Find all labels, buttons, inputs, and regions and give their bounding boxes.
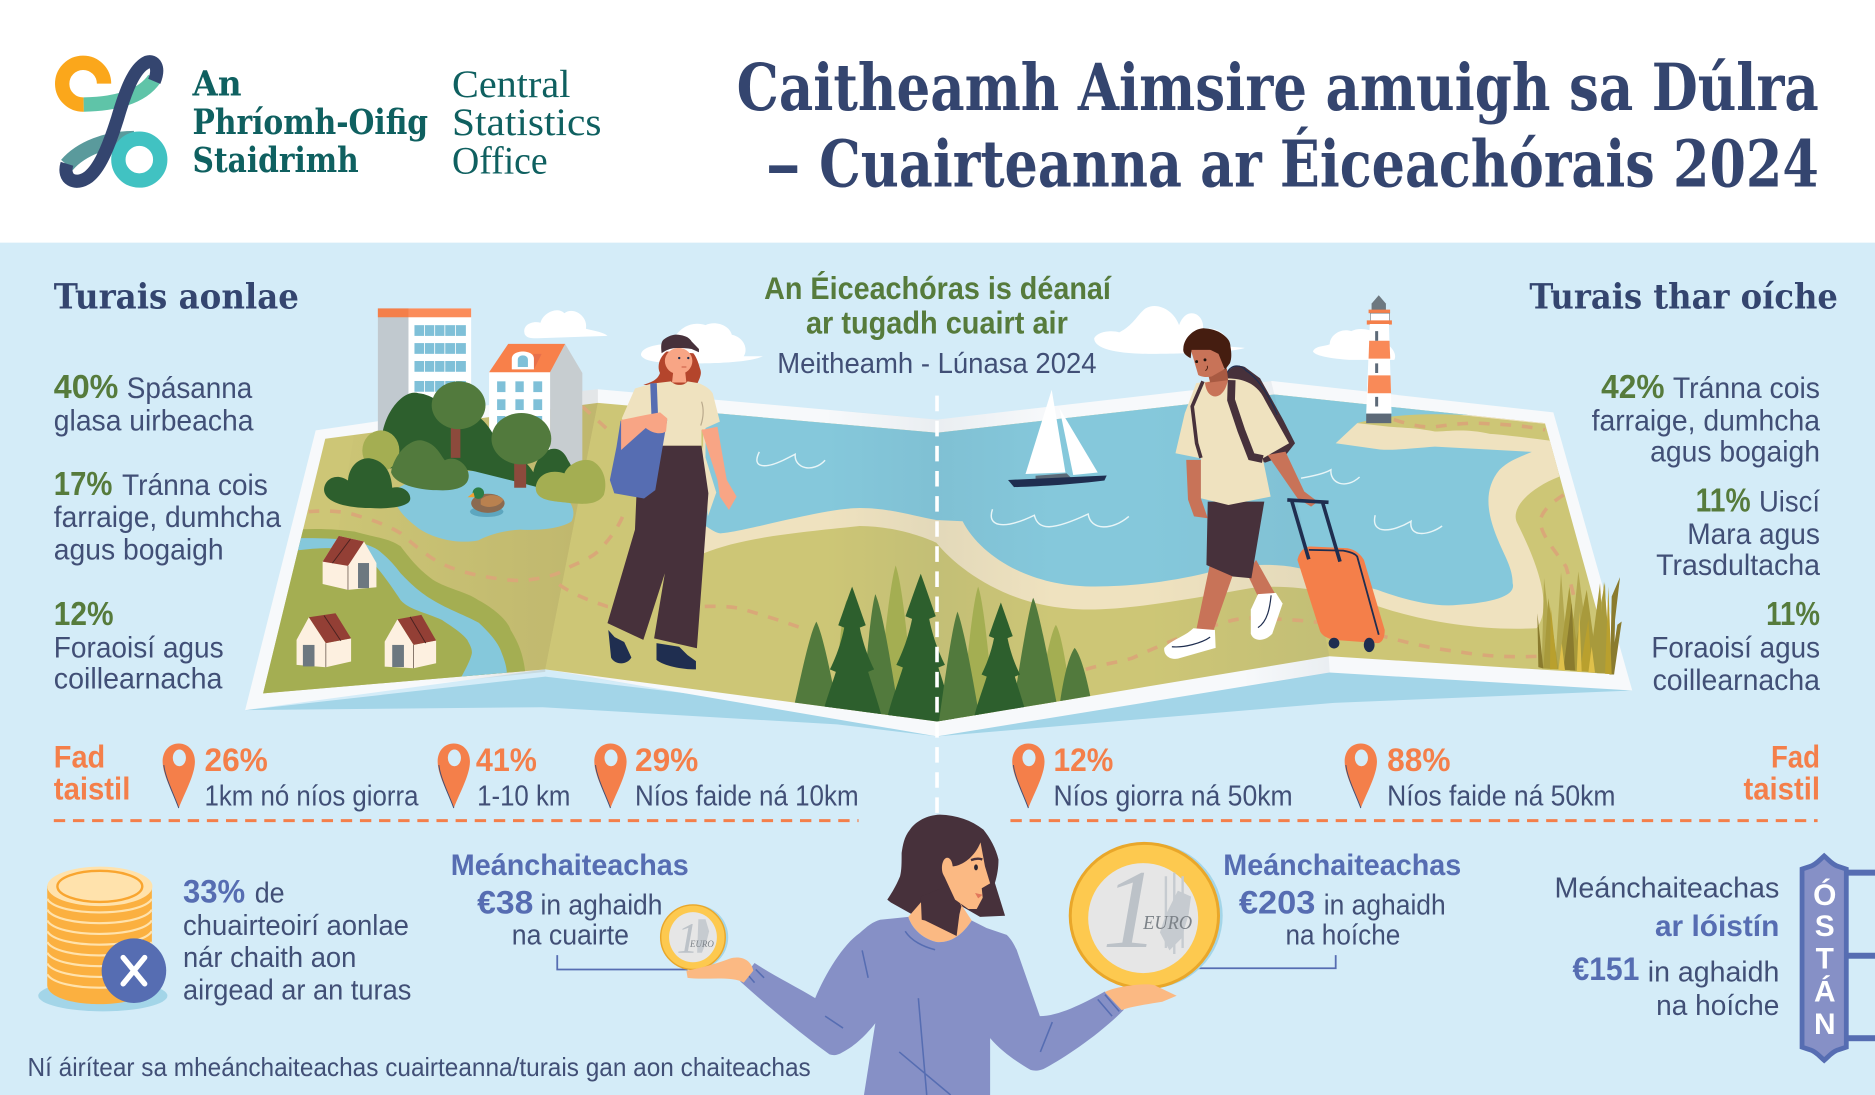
hotel text: in aghaidh: [1648, 956, 1779, 988]
icon: sailing boat: [1008, 390, 1107, 487]
icon: waves: [757, 452, 1442, 533]
map sheet: [245, 381, 1632, 736]
travel distance label right: [1743, 739, 1820, 807]
hotel text: Meánchaiteachas: [1555, 873, 1779, 905]
overnight ecosystem stats: 11%: [1766, 596, 1820, 633]
pond: [394, 471, 573, 542]
icon: house 1: [323, 536, 376, 590]
icon: house 3: [385, 615, 436, 668]
overnight ecosystem stats: [1592, 369, 1821, 697]
distance stat: 41%: 1-10 km: [477, 781, 570, 813]
icon: small euro coin: 1: [677, 916, 698, 963]
icon: tall building: [378, 308, 471, 434]
icon: house 2: [297, 613, 351, 667]
distance stat: 88%: [1345, 742, 1616, 813]
clouds: [524, 306, 1395, 363]
overnight average spend: [1223, 849, 1461, 951]
overnight ecosystem stats: farraige, dumhcha: [1592, 404, 1821, 437]
icon: hotel sign: Á: [1814, 975, 1836, 1009]
day-trip ecosystem stats: 12%: [54, 596, 114, 633]
logo Irish name: Staidrimh: [193, 140, 359, 181]
overnight ecosystem stats: Mara agus: [1687, 518, 1820, 551]
day-trip ecosystem stats: [54, 369, 282, 696]
map terrain: [263, 394, 1614, 722]
distance stat: 26%: [163, 742, 419, 813]
icon: pin: [594, 744, 627, 808]
houses: [297, 536, 436, 668]
icon: woman with bag: [607, 335, 737, 669]
icon: hotel sign: Ó: [1813, 878, 1836, 912]
logo English name: Statistics: [452, 100, 601, 144]
overnight average spend: €203: [1239, 884, 1315, 920]
day-trip average spend: in aghaidh: [540, 889, 662, 921]
icon: small euro coin: EURO: [689, 939, 714, 950]
day-trip ecosystem stats: Tránna cois: [122, 469, 268, 502]
icon: man with suitcase: [1164, 328, 1385, 659]
icon: coin stack with cross: [38, 867, 167, 1011]
distance stat: 26%: 26%: [204, 742, 268, 778]
light blue background: [0, 243, 1875, 1095]
no-spend text: [183, 874, 411, 1006]
overnight average spend: Meánchaiteachas: [1223, 849, 1461, 882]
travel distance label right: taistil: [1743, 772, 1820, 807]
icon: conifer forest: [792, 565, 1094, 724]
icon: lighthouse: [1366, 295, 1392, 423]
no-spend text: chuairteoirí aonlae: [183, 910, 409, 942]
icon: duck: [468, 487, 505, 517]
centre heading: ar tugadh cuairt air: [806, 306, 1068, 341]
river banks: [263, 529, 525, 694]
day-trip ecosystem stats: coillearnacha: [54, 663, 223, 696]
day-trip average spend: Meánchaiteachas: [451, 849, 689, 882]
distance stat: 88%: Níos faide ná 50km: [1387, 781, 1616, 813]
icon: small euro coin: [661, 905, 728, 969]
travel distance label left: Fad: [54, 739, 105, 774]
coast sand: [703, 394, 1559, 629]
icon: large euro coin: 1: [1103, 848, 1159, 972]
no-spend text: 33%: [183, 874, 245, 910]
icon: large euro coin: EURO: [1142, 912, 1193, 934]
header band: [0, 0, 1875, 243]
day-trip ecosystem stats: 40%: [54, 369, 118, 406]
icon: woman holding coins: [686, 815, 1177, 1095]
logo English name: [452, 62, 601, 182]
travel distance label right: Fad: [1771, 739, 1820, 774]
river: [287, 538, 507, 679]
hotel text: na hoíche: [1656, 990, 1779, 1022]
day-trip average spend: [451, 849, 689, 951]
distance stat: 41%: [438, 742, 570, 813]
day-trip ecosystem stats: glasa uirbeacha: [54, 404, 254, 437]
icon: small building: [489, 344, 582, 469]
distance stat: 41%: 41%: [476, 742, 537, 778]
day-trip ecosystem stats: agus bogaigh: [54, 533, 224, 566]
overnight average spend: in aghaidh: [1324, 889, 1446, 921]
map paths: [309, 406, 1574, 669]
overnight ecosystem stats: Tránna cois: [1673, 372, 1820, 405]
icon: hotel sign: N: [1814, 1008, 1836, 1041]
day-trip average spend: na cuairte: [512, 919, 629, 951]
distance stat: 29%: 29%: [635, 742, 698, 778]
map shadow: [245, 667, 1632, 736]
distance stat: 12%: [1012, 742, 1293, 813]
day-trip ecosystem stats: farraige, dumhcha: [54, 501, 282, 534]
sea: [706, 389, 1532, 605]
distance stat: 88%: 88%: [1387, 742, 1450, 778]
icon: large euro coin: [1070, 843, 1223, 989]
distance stat: 12%: 12%: [1053, 742, 1113, 778]
icon: pin: [438, 744, 470, 808]
logo Irish name: Phríomh-Oifig: [193, 102, 428, 143]
cape land: [1357, 414, 1550, 441]
dashed separators: [54, 819, 1818, 822]
distance stat: 29%: Níos faide ná 10km: [635, 781, 859, 813]
map: [239, 295, 1638, 741]
overnight ecosystem stats: Trasdultacha: [1656, 549, 1821, 582]
front lock: [921, 885, 961, 936]
strip of sea behind cape: [1390, 406, 1472, 417]
hotel text: €151: [1572, 951, 1639, 987]
day-trip ecosystem stats: 17%: [54, 466, 112, 503]
face: [943, 842, 990, 909]
hotel text: [1555, 873, 1779, 1022]
chest skin: [908, 891, 972, 942]
logo Irish name: [192, 64, 428, 181]
logo English name: Central: [452, 62, 570, 106]
title: –: [765, 126, 801, 202]
centre heading: An Éiceachóras is déanaí: [764, 271, 1112, 306]
overnight ecosystem stats: Foraoisí agus: [1651, 631, 1820, 664]
day-trip ecosystem stats: Spásanna: [127, 372, 253, 405]
distance stat: 26%: 1km nó níos giorra: [204, 781, 419, 813]
no-spend text: nár chaith aon: [183, 942, 356, 974]
icon: hotel sign: T: [1816, 942, 1834, 975]
heading: overnight trips: Turais thar oíche: [1529, 276, 1838, 317]
distance stat: 29%: [594, 742, 859, 813]
overnight ecosystem stats: 42%: [1601, 369, 1665, 406]
hands: [686, 958, 753, 983]
fold shading: [897, 512, 937, 646]
centre heading: Meitheamh - Lúnasa 2024: [777, 348, 1097, 380]
hair back: [887, 815, 1005, 936]
travel distance label left: taistil: [54, 772, 130, 807]
sweater: [740, 917, 1124, 1095]
icon: pin: [163, 744, 195, 808]
connector lines: [557, 955, 1336, 969]
icon: hotel sign: [1802, 856, 1875, 1060]
centre heading: [764, 271, 1112, 380]
logo Irish name: An: [192, 64, 242, 105]
icon: pin: [1345, 744, 1377, 808]
dashed fold line: [936, 396, 939, 818]
travel distance label left: [54, 739, 130, 807]
overnight ecosystem stats: Uiscí: [1759, 486, 1820, 519]
title: [737, 50, 1819, 202]
no-spend text: airgead ar an turas: [183, 974, 411, 1006]
overnight ecosystem stats: 11%: [1696, 483, 1751, 520]
footnote: Ní áirítear sa mheánchaiteachas cuairteanna/turais gan aon chaiteachas: [28, 1054, 811, 1082]
icon: pin: [1012, 744, 1045, 808]
icon: marram grass: [1537, 571, 1622, 674]
overnight average spend: na hoíche: [1285, 919, 1400, 951]
distance stat: 12%: Níos giorra ná 50km: [1053, 781, 1293, 813]
logo: [62, 62, 601, 182]
no-spend text: de: [255, 878, 285, 910]
icon: trees and bushes: [324, 381, 605, 508]
heading: day trips: Turais aonlae: [54, 276, 299, 317]
logo icon: [62, 62, 160, 181]
icon: hotel sign: S: [1815, 910, 1835, 943]
day-trip average spend: €38: [477, 884, 533, 920]
overnight ecosystem stats: agus bogaigh: [1650, 435, 1820, 468]
hotel text: ar lóistín: [1655, 910, 1779, 943]
logo English name: Office: [452, 138, 548, 182]
day-trip ecosystem stats: Foraoisí agus: [54, 631, 224, 664]
overnight ecosystem stats: coillearnacha: [1653, 664, 1821, 697]
